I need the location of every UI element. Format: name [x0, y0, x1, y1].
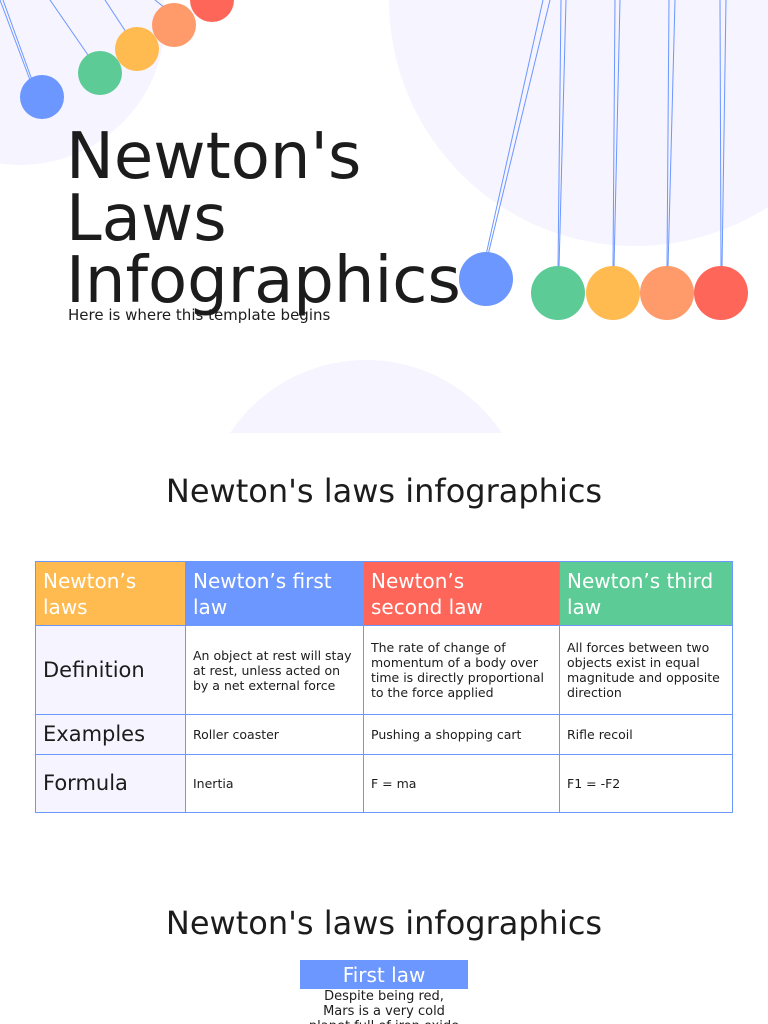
title: Laws: [66, 182, 227, 256]
table: Newton’s laws: [43, 568, 136, 618]
table: Examples: [43, 722, 145, 746]
icon: left pendulum balls: [20, 0, 234, 119]
subtitle: Here is where this template begins: [68, 306, 330, 324]
table: Formula: [43, 771, 128, 795]
table: An object at rest will stay at rest, unless acted on by a net external force: [193, 648, 352, 692]
first law card: First law: [343, 963, 425, 987]
table: Definition: [43, 658, 145, 682]
background shapes and pendulums: [0, 0, 768, 433]
table: Newton’s first law: [193, 568, 332, 618]
table: Newton’s: [371, 568, 464, 592]
table: Rifle recoil: [567, 727, 633, 742]
title: Newton's: [66, 120, 361, 194]
table: [35, 561, 733, 813]
title: Infographics: [66, 244, 461, 318]
table: F1 = -F2: [567, 776, 620, 791]
first law card: [300, 960, 468, 1024]
table: All forces between two objects exist in equal magnitude and opposite direction: [567, 640, 720, 700]
icon: right pendulum balls: [459, 252, 748, 320]
table: second law: [371, 594, 483, 618]
table: The rate of change of momentum of a body over time is directly proportional to the force applied: [371, 640, 544, 700]
heading 2: Newton's laws infographics: [166, 904, 602, 942]
table: Roller coaster: [193, 727, 279, 742]
table: Pushing a shopping cart: [371, 727, 521, 742]
table: F = ma: [371, 776, 416, 791]
table: Inertia: [193, 776, 233, 791]
heading 1: Newton's laws infographics: [166, 472, 602, 510]
title: [66, 120, 461, 318]
table: Newton’s third law: [567, 568, 713, 618]
